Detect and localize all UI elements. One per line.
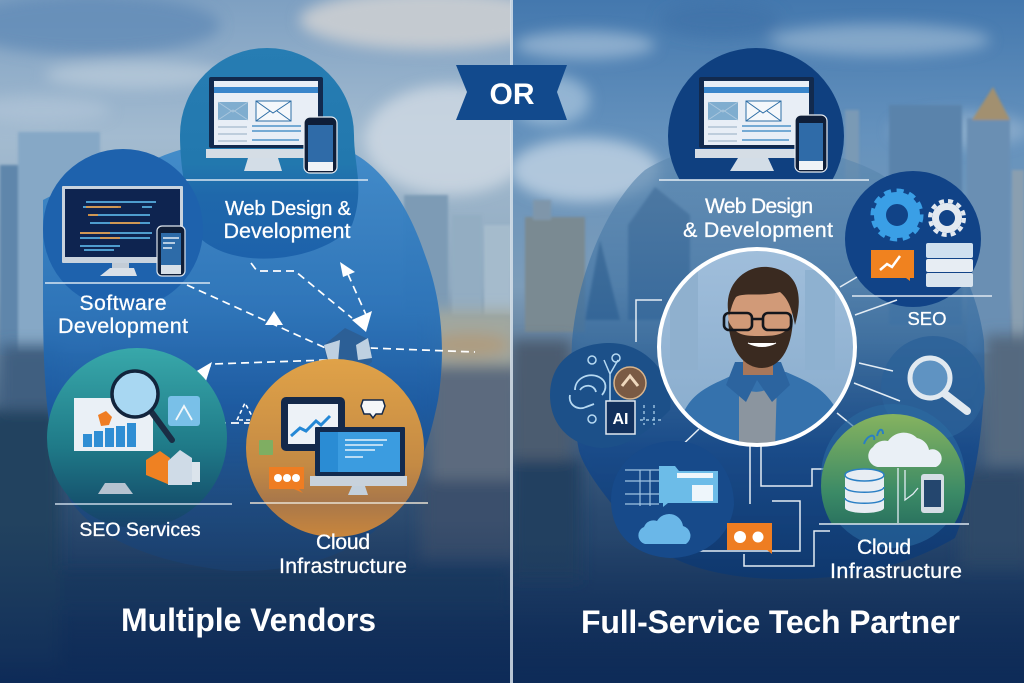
text: cloud infrastructure: Infrastructure	[279, 554, 407, 578]
icon bubble: web design	[659, 48, 869, 242]
heading: multiple vendors: Multiple Vendors	[121, 602, 376, 638]
icon bubble: AI: AI	[612, 411, 628, 428]
icon bubble: cloud infrastructure	[246, 359, 428, 537]
icon bubble: SEO gears and server	[845, 171, 992, 307]
large blue bubble	[43, 138, 442, 571]
network hub with dashed arrows	[187, 262, 475, 423]
text: cloud infrastructure	[279, 531, 407, 578]
right city background	[510, 0, 1024, 683]
label	[683, 195, 833, 242]
icon bubble: web design	[180, 48, 368, 259]
icon bubble: apps and cloud	[611, 441, 772, 558]
label: & Development	[683, 218, 833, 242]
icon bubble: cloud infrastructure	[819, 404, 969, 558]
label: Development	[58, 314, 188, 338]
text: SEO services: SEO Services	[79, 519, 201, 541]
OR ribbon: OR	[490, 78, 535, 111]
label	[58, 292, 188, 338]
text: SEO: SEO	[907, 308, 947, 329]
label: Software	[80, 292, 166, 315]
icon bubble: AI	[550, 343, 671, 448]
text: cloud infrastructure: Cloud	[316, 531, 370, 554]
label: Web Design &	[225, 198, 352, 220]
icon bubble: magnifier	[881, 336, 985, 440]
text: cloud infrastructure	[830, 536, 962, 583]
label	[224, 198, 352, 243]
label: Development	[224, 219, 351, 243]
large translucent bubble	[571, 144, 984, 579]
text: cloud infrastructure: Infrastructure	[830, 559, 962, 583]
label: Web Design	[705, 195, 813, 218]
connector lines	[636, 277, 900, 566]
icon bubble: software development	[43, 149, 210, 338]
panel: full-service partner cluster	[550, 48, 992, 583]
left city background	[0, 0, 560, 683]
heading: full-service tech partner: Full-Service Tech Partner	[581, 604, 960, 640]
center divider	[510, 0, 513, 683]
text: cloud infrastructure: Cloud	[857, 536, 911, 559]
OR ribbon	[456, 65, 567, 120]
circular portrait of partner	[659, 249, 855, 450]
icon bubble: SEO services	[47, 348, 232, 528]
panel: multiple vendors cluster	[43, 48, 475, 578]
